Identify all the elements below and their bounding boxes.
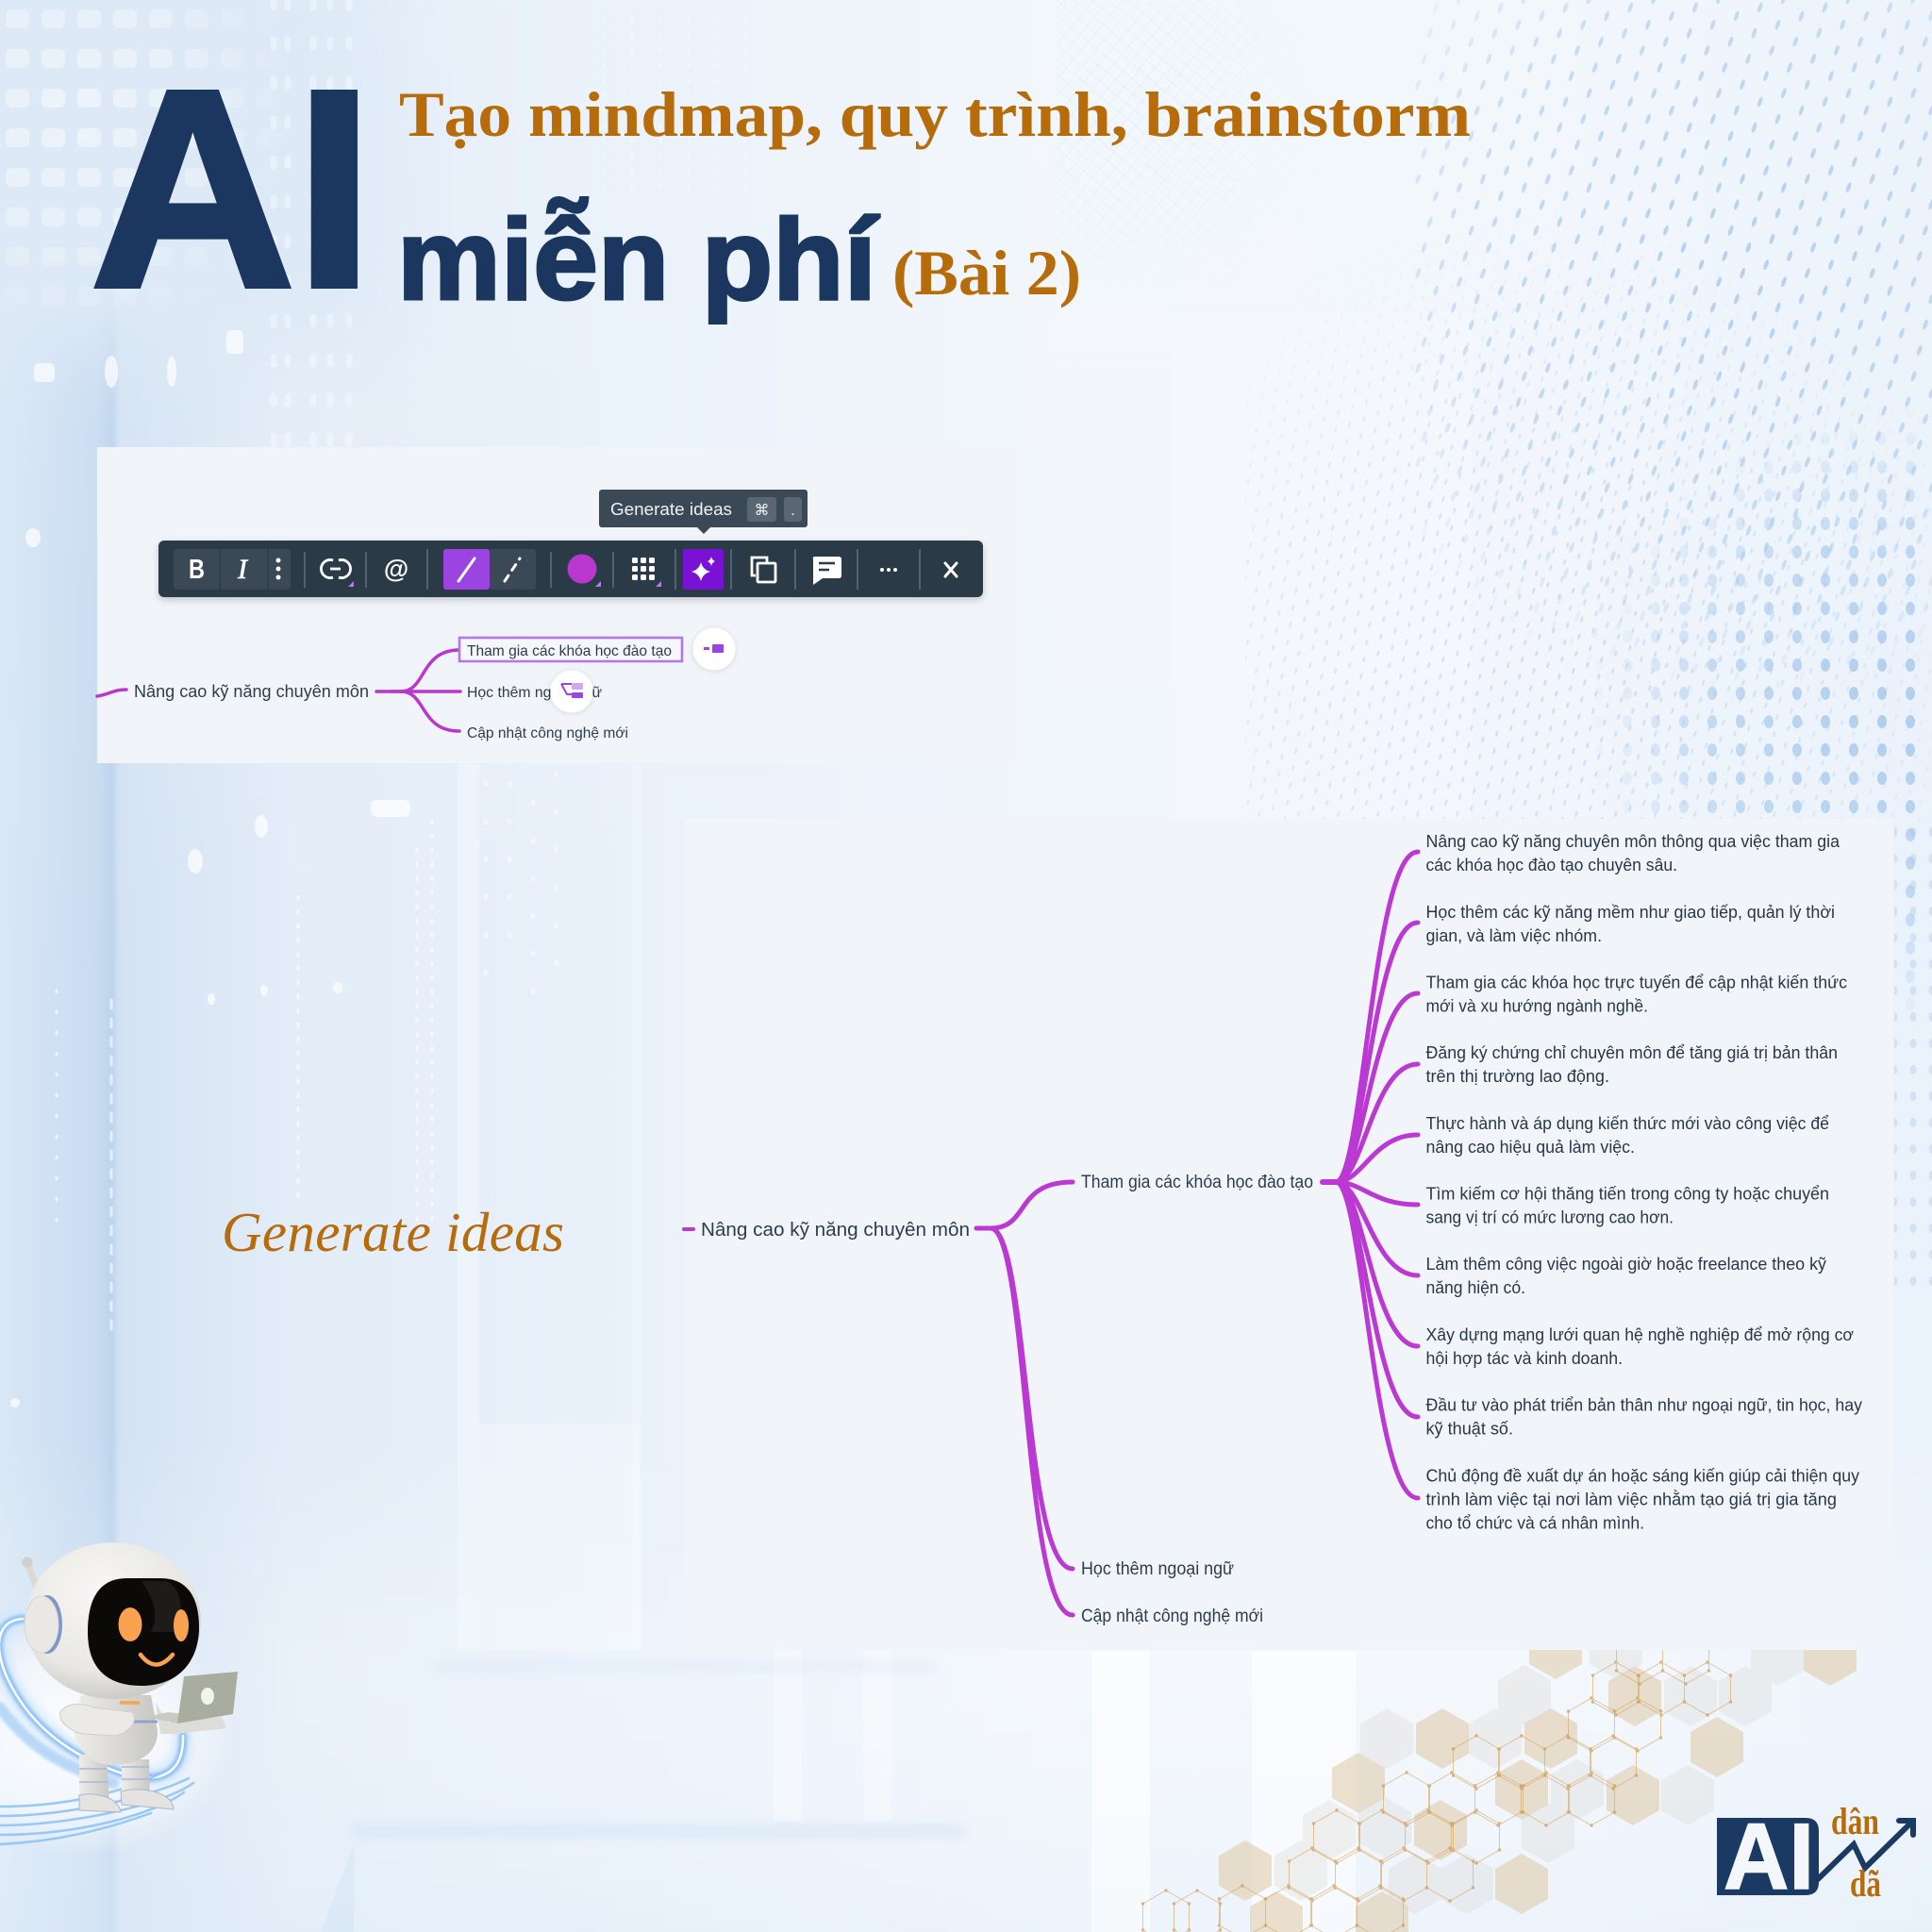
item 2 (1426, 902, 1835, 945)
connector lines (684, 852, 1418, 1615)
icon: comment (813, 557, 841, 585)
node: technology: Cập nhật công nghệ mới (467, 725, 628, 741)
text format buttons: B (189, 555, 205, 585)
head (25, 1542, 201, 1699)
antenna (23, 1557, 41, 1599)
arms (156, 1703, 226, 1734)
button: add sibling (551, 670, 592, 713)
item 6: sang vị trí có mức lương cao hơn. (1426, 1208, 1674, 1226)
honeycomb decoration (1141, 1619, 1857, 1932)
item 7 (1426, 1254, 1827, 1297)
item 4: trên thị trường lao động. (1426, 1066, 1609, 1086)
title: miễn phí: miễn phí (397, 195, 880, 324)
text format buttons: I (237, 554, 249, 585)
torso (73, 1695, 158, 1765)
title: AI: AI (91, 32, 374, 346)
button: solid line (443, 549, 490, 590)
item 8: hội hợp tác và kinh doanh. (1426, 1348, 1623, 1368)
icon: link (321, 560, 351, 578)
laptop (146, 1672, 238, 1724)
item 2: Học thêm các kỹ năng mềm như giao tiếp, quản lý thời (1426, 902, 1835, 922)
tooltip: Generate ideas: Generate ideas (610, 500, 732, 519)
item 8 (1426, 1324, 1854, 1368)
text format buttons (174, 549, 291, 590)
node: root: Nâng cao kỹ năng chuyên môn (701, 1220, 970, 1241)
icon: at sign: @ (384, 555, 408, 583)
glow and swirl (0, 1613, 236, 1858)
button: dashed line (490, 549, 536, 590)
item 10: cho tổ chức và cá nhân mình. (1426, 1513, 1644, 1532)
item 7: năng hiện có. (1426, 1277, 1525, 1297)
icon: grid (632, 558, 655, 580)
tooltip: Generate ideas: . (791, 503, 795, 519)
title: lesson number: (Bài 2) (892, 237, 1081, 308)
button: add child (692, 628, 736, 670)
label: Generate ideas: Generate ideas (222, 1201, 564, 1263)
icon: more (880, 568, 897, 572)
mindmap branches small (97, 650, 460, 731)
item 6: Tìm kiếm cơ hội thăng tiến trong công ty hoặc chuyển (1426, 1183, 1829, 1204)
item 10 (1426, 1466, 1860, 1532)
item 5 (1426, 1113, 1829, 1157)
headphone (25, 1595, 62, 1654)
item 10: Chủ động đề xuất dự án hoặc sáng kiến giúp cải thiện quy (1426, 1466, 1860, 1485)
icon: copy (752, 558, 775, 582)
title: subtitle line: Tạo mindmap, quy trình, brainstorm (399, 78, 1471, 150)
separators (305, 549, 920, 590)
node: selected (459, 638, 682, 661)
panel: full mindmap (684, 819, 1893, 1650)
tooltip: Generate ideas: ⌘ (755, 501, 770, 519)
item 9: kỹ thuật số. (1426, 1419, 1513, 1438)
node: training: Tham gia các khóa học đào tạo (1081, 1173, 1313, 1192)
node: language: Học thêm ngoại ngữ (467, 685, 602, 701)
icon: close (945, 563, 957, 576)
face screen (88, 1578, 199, 1686)
legs (79, 1755, 174, 1812)
item 1 (1426, 831, 1840, 874)
robot illustration (0, 1542, 238, 1858)
node: root: Nâng cao kỹ năng chuyên môn (134, 682, 369, 701)
node: selected: Tham gia các khóa học đào tạo (467, 643, 672, 659)
item 10: trình làm việc tại nơi làm việc nhằm tạo giá trị gia tăng (1426, 1489, 1837, 1509)
item 6 (1426, 1183, 1829, 1226)
node: language: Học thêm ngoại ngữ (1081, 1559, 1234, 1579)
item 7: Làm thêm công việc ngoài giờ hoặc freelance theo kỹ (1426, 1254, 1827, 1274)
item 2: gian, và làm việc nhóm. (1426, 925, 1602, 945)
item 4 (1426, 1042, 1838, 1086)
item 3 (1426, 972, 1847, 1015)
small triangles (348, 581, 661, 587)
logo (1717, 1800, 1913, 1908)
logo: dã (1850, 1862, 1881, 1905)
panel: toolbar screenshot (97, 447, 1021, 763)
item 5: nâng cao hiệu quả làm việc. (1426, 1137, 1635, 1157)
tooltip: Generate ideas (599, 490, 808, 534)
logo: dân (1831, 1800, 1879, 1842)
logo: AI (1724, 1804, 1814, 1908)
item 8: Xây dựng mạng lưới quan hệ nghề nghiệp để mở rộng cơ (1426, 1324, 1854, 1344)
item 1: các khóa học đào tạo chuyên sâu. (1426, 855, 1677, 874)
node: technology: Cập nhật công nghệ mới (1081, 1607, 1263, 1626)
button: generate ideas sparkle (683, 549, 724, 590)
item 9 (1426, 1394, 1863, 1438)
item 5: Thực hành và áp dụng kiến thức mới vào công việc để (1426, 1113, 1829, 1133)
item 3: mới và xu hướng ngành nghề. (1426, 996, 1648, 1015)
toolbar (158, 541, 983, 597)
item 4: Đăng ký chứng chỉ chuyên môn để tăng giá trị bản thân (1426, 1042, 1838, 1062)
icon: colour circle (568, 555, 596, 583)
item 1: Nâng cao kỹ năng chuyên môn thông qua việc tham gia (1426, 831, 1840, 851)
item 9: Đầu tư vào phát triển bản thân như ngoại ngữ, tin học, hay (1426, 1394, 1863, 1415)
item 3: Tham gia các khóa học trực tuyến để cập nhật kiến thức (1426, 972, 1847, 992)
